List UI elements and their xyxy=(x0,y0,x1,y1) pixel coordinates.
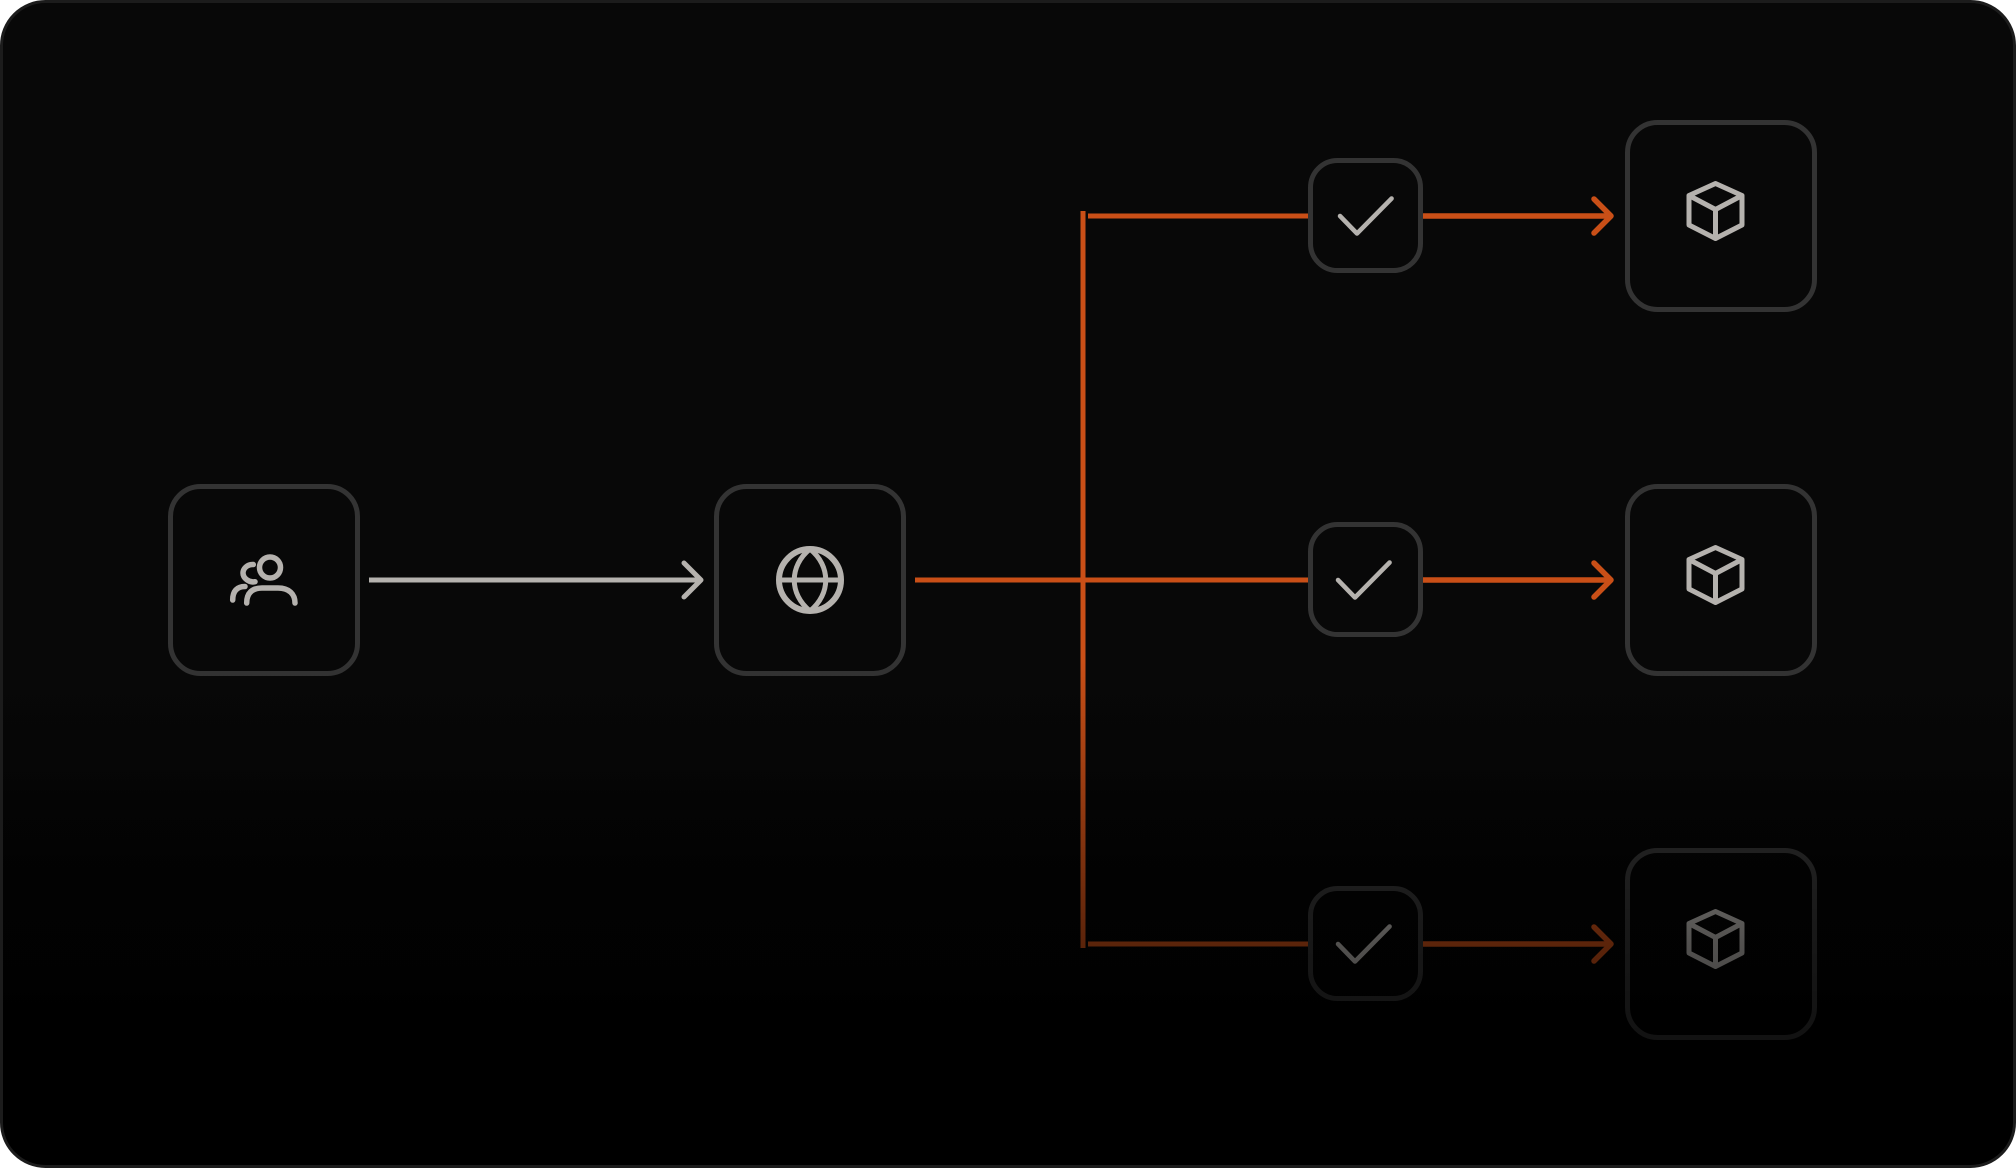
box: users xyxy=(170,486,358,674)
box: cube 2 xyxy=(1628,486,1814,674)
icon: users xyxy=(233,557,295,603)
icon: cube 3 xyxy=(1689,912,1742,966)
icon: check 1 xyxy=(1340,198,1392,234)
icon: cube 2 xyxy=(1689,548,1742,602)
box: cube 3 xyxy=(1628,850,1814,1038)
box: check 1 xyxy=(1310,160,1420,270)
connector: branching trunk xyxy=(915,211,1308,948)
box: check 2 xyxy=(1310,524,1420,634)
row 3: check to cube xyxy=(1310,850,1814,1038)
icon: check 3 xyxy=(1338,926,1390,962)
arrow: check 3 to cube 3 xyxy=(1423,927,1611,961)
icon: globe xyxy=(779,549,841,611)
arrow: check 1 to cube 1 xyxy=(1423,199,1611,233)
arrow: check 2 to cube 2 xyxy=(1423,563,1611,597)
icon: cube 1 xyxy=(1689,184,1742,238)
arrow: users to globe xyxy=(369,563,701,597)
icon: check 2 xyxy=(1338,562,1390,598)
row 2: check to cube xyxy=(1310,486,1814,674)
box: cube 1 xyxy=(1628,122,1814,310)
row 1: check to cube xyxy=(1310,122,1814,310)
box: globe xyxy=(716,486,904,674)
box: check 3 xyxy=(1310,888,1420,998)
